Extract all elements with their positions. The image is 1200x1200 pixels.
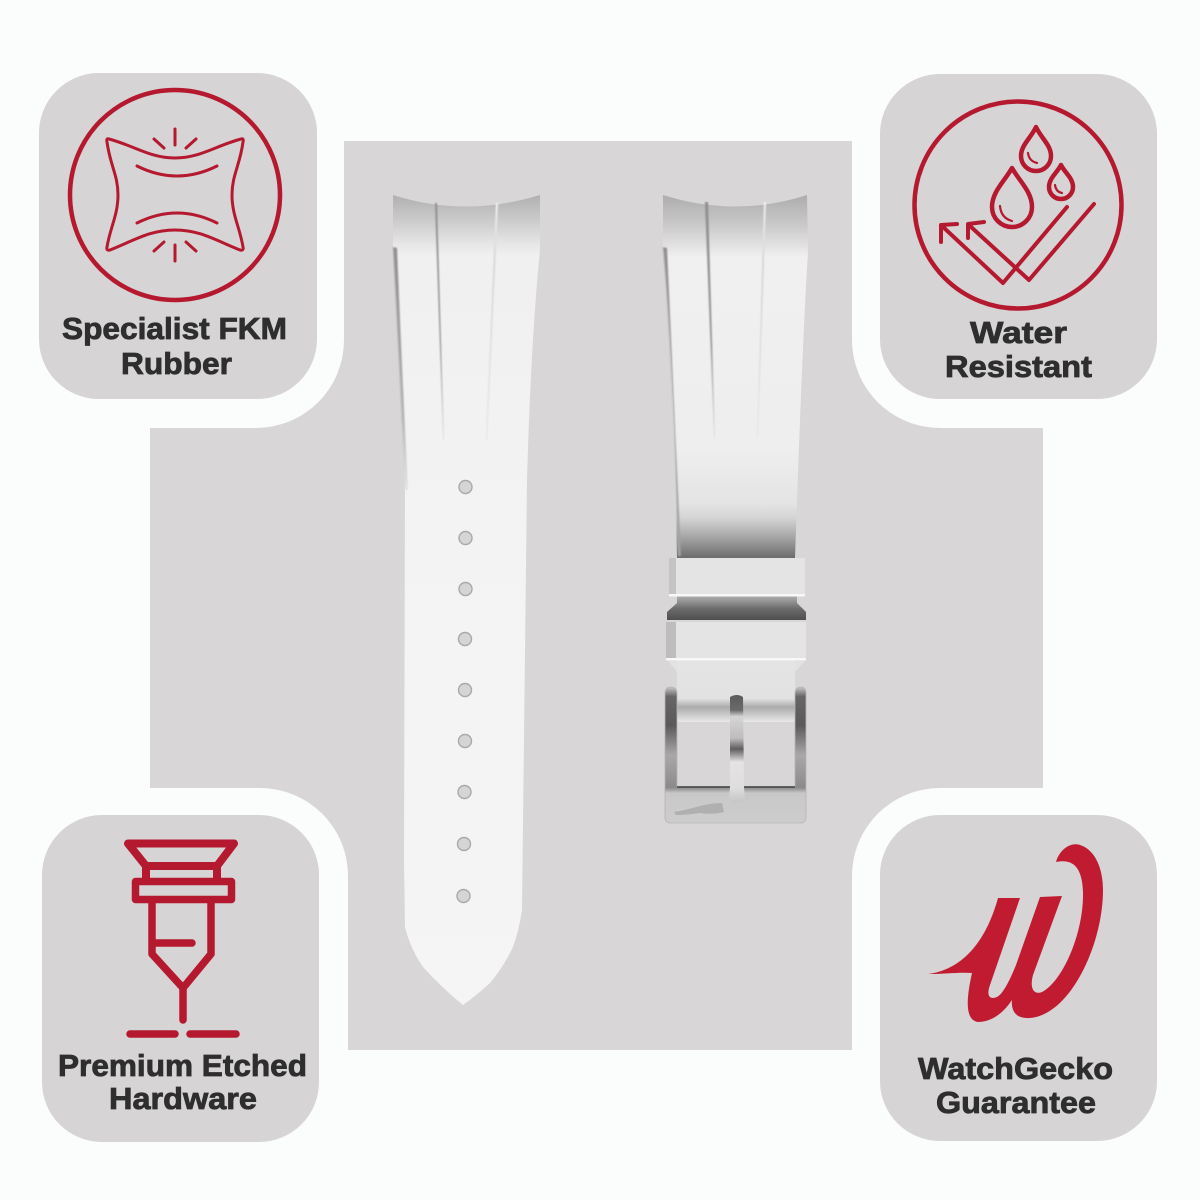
strap holes bbox=[457, 480, 472, 902]
panel: Specialist FKM Rubber bbox=[39, 73, 317, 399]
groove right bbox=[757, 202, 766, 438]
right strap (buckle piece) bbox=[663, 195, 808, 823]
dark gap between keepers bbox=[667, 596, 806, 620]
label line two: Hardware bbox=[109, 1081, 257, 1116]
label: WatchGecko bbox=[918, 1051, 1113, 1086]
icon: stretch pillow bbox=[70, 90, 280, 300]
buckle tongue bbox=[729, 695, 745, 802]
panel: Premium Etched Hardware bbox=[42, 815, 319, 1142]
left strap (long piece) bbox=[393, 195, 540, 1005]
panel: Water Resistant bbox=[880, 74, 1157, 399]
icon: water drops and arrows bbox=[914, 102, 1122, 308]
label: Specialist FKM bbox=[62, 311, 287, 346]
label: Premium Etched bbox=[58, 1048, 307, 1083]
groove left bbox=[435, 203, 444, 440]
strap below keepers bbox=[677, 660, 795, 722]
keeper upper bbox=[669, 558, 805, 596]
label: Water bbox=[970, 315, 1067, 350]
groove left bbox=[705, 202, 715, 438]
groove right bbox=[486, 203, 498, 440]
label line two: Rubber bbox=[121, 346, 232, 381]
metal buckle bbox=[665, 687, 806, 823]
label line two: Resistant bbox=[945, 349, 1092, 384]
engraved logo bbox=[674, 803, 724, 815]
central grey backdrop bbox=[150, 141, 1043, 1050]
keeper wings bbox=[668, 661, 805, 672]
icon: WatchGecko W logo bbox=[928, 844, 1103, 1022]
label line two: Guarantee bbox=[936, 1085, 1096, 1120]
keeper lower bbox=[666, 622, 806, 660]
panel: WatchGecko Guarantee bbox=[880, 815, 1157, 1141]
icon: laser etching nozzle bbox=[128, 844, 236, 1034]
